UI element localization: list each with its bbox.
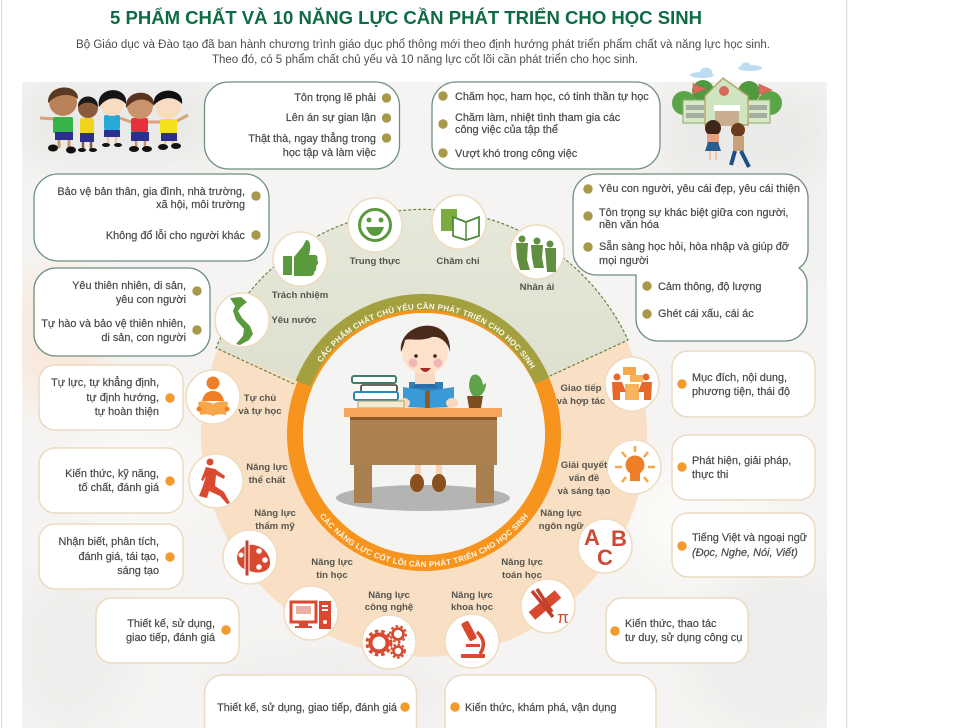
label: language: ngôn ngữ bbox=[539, 521, 583, 532]
panel: compassion details: mọi người bbox=[599, 255, 649, 267]
label: informatics: Năng lực bbox=[311, 557, 353, 568]
panel: self-reliance details: Tự lực, tự khẳng định, bbox=[51, 376, 159, 389]
label: technology: công nghệ bbox=[365, 602, 413, 613]
panel: patriotism details: Yêu thiên nhiên, di sản, bbox=[72, 280, 186, 292]
panel: technology details bbox=[204, 675, 416, 728]
panel: honesty details bbox=[204, 82, 400, 169]
panel: patriotism details: Tự hào và bảo vệ thiên nhiên, bbox=[41, 318, 186, 330]
label: communication: Giao tiếp bbox=[560, 383, 602, 394]
icon: smiley, honesty bbox=[348, 198, 402, 252]
panel: aesthetic details bbox=[39, 524, 183, 589]
panel: compassion details: nền văn hóa bbox=[599, 219, 660, 231]
panel: problem solving details: Phát hiện, giải pháp, bbox=[692, 455, 791, 467]
panel: aesthetic details: Nhận biết, phân tích, bbox=[58, 536, 159, 548]
label: mathematics bbox=[501, 557, 543, 581]
icon: ABC letters, language: C bbox=[597, 545, 613, 570]
panel: responsibility details bbox=[34, 174, 269, 261]
panel: diligence details: Chăm làm, nhiệt tình tham gia các bbox=[455, 112, 621, 124]
panel: compassion details: Sẵn sàng học hỏi, hòa nhập và giúp đỡ bbox=[599, 240, 789, 253]
panel: informatics details bbox=[96, 598, 239, 663]
icon: ABC letters, language bbox=[578, 519, 632, 573]
label: technology: Năng lực bbox=[368, 590, 410, 601]
background photo wash bbox=[10, 82, 870, 728]
label: problem solving bbox=[558, 460, 611, 497]
icon: reader, self-study bbox=[186, 370, 240, 424]
central illustration: student at desk bbox=[336, 326, 510, 511]
label: science: Năng lực bbox=[451, 590, 493, 601]
label: self-study: và tự học bbox=[238, 406, 282, 417]
label: language: Năng lực bbox=[540, 508, 582, 519]
panel: diligence details: Vượt khó trong công việc bbox=[455, 148, 578, 160]
label: self-study: Tự chủ bbox=[244, 393, 276, 404]
panel: technology details: Thiết kế, sử dụng, giao tiếp, đánh giá bbox=[217, 702, 398, 714]
panel: compassion details: Cảm thông, độ lượng bbox=[658, 281, 761, 293]
icon: microscope, science bbox=[445, 614, 499, 668]
panel: communication details bbox=[672, 351, 815, 417]
kid 2 bbox=[78, 96, 98, 152]
panel: mathematics details bbox=[606, 598, 748, 663]
icon: palette, aesthetic bbox=[223, 530, 277, 584]
icon: runner, physical bbox=[189, 454, 243, 508]
icon: books, diligence bbox=[432, 195, 486, 249]
panel: honesty details: Tôn trọng lẽ phải bbox=[294, 92, 376, 104]
panel: responsibility details: xã hội, môi trường bbox=[156, 199, 245, 211]
panel: compassion details: Ghét cái xấu, cái ác bbox=[658, 308, 754, 320]
icon: light bulb, problem solving bbox=[607, 440, 661, 494]
ring text: qualities: CÁC PHẨM CHẤT CHỦ YẾU CẦN PHÁT TRIỂN CHO HỌC SINH bbox=[318, 302, 536, 369]
panel: informatics details: Thiết kế, sử dụng, bbox=[127, 618, 215, 630]
label: aesthetic: Năng lực bbox=[254, 508, 296, 519]
label: technology bbox=[365, 590, 413, 613]
panel: science details bbox=[445, 675, 656, 728]
label: physical: Năng lực bbox=[246, 462, 288, 473]
label: responsibility: Trách nhiệm bbox=[272, 290, 328, 301]
panel: compassion details: Yêu con người, yêu cái đẹp, yêu cái thiện bbox=[599, 183, 800, 195]
panel: mathematics details: tư duy, sử dụng công cụ bbox=[625, 632, 742, 644]
illustration: group of children bbox=[40, 87, 188, 154]
label: patriotism: Yêu nước bbox=[271, 315, 317, 326]
panel: communication details: Mục đích, nội dung, bbox=[692, 372, 787, 384]
illustration: school and pupils bbox=[672, 62, 782, 167]
icon: thumbs up, responsibility bbox=[273, 232, 327, 286]
label: science: khoa học bbox=[451, 602, 494, 613]
ring: olive and orange bbox=[295, 302, 553, 563]
panel: mathematics details: Kiến thức, thao tác bbox=[625, 618, 717, 630]
panel: patriotism details bbox=[34, 268, 210, 356]
green qualities sector bbox=[216, 209, 628, 434]
panel: patriotism details: di sản, con người bbox=[101, 332, 186, 344]
label: language bbox=[539, 508, 583, 532]
icon: ruler compass pi, mathematics: π bbox=[557, 608, 569, 627]
panel: aesthetic details: sáng tạo bbox=[117, 565, 159, 577]
label: problem solving: và sáng tạo bbox=[558, 486, 611, 497]
panel: patriotism details: yêu con người bbox=[116, 294, 186, 306]
label: aesthetic bbox=[254, 508, 296, 532]
kid 4 bbox=[126, 93, 154, 152]
panel: compassion details: Tôn trọng sự khác biệt giữa con người, bbox=[599, 207, 788, 219]
label: diligence: Chăm chỉ bbox=[436, 256, 480, 267]
panel: honesty details: Lên án sự gian lận bbox=[286, 112, 376, 124]
icon: Vietnam map, patriotism bbox=[215, 293, 269, 347]
panel: compassion details bbox=[573, 174, 808, 341]
panel: language details: (Đọc, Nghe, Nói, Viết) bbox=[692, 547, 798, 559]
icon: ABC letters, language: B bbox=[611, 526, 627, 551]
panel: communication details: phương tiện, thái độ bbox=[692, 386, 790, 398]
panel: informatics details: giao tiếp, đánh giá bbox=[126, 632, 216, 644]
panel: problem solving details: thực thi bbox=[692, 469, 728, 481]
label: physical: thể chất bbox=[249, 475, 286, 486]
orange competencies disk bbox=[201, 211, 647, 657]
panel: problem solving details bbox=[672, 435, 815, 500]
panel: language details bbox=[672, 513, 815, 577]
icon: computer, informatics bbox=[284, 586, 338, 640]
panel: self-reliance details bbox=[39, 365, 183, 430]
label: self-study bbox=[238, 393, 282, 417]
intro text bbox=[76, 39, 770, 66]
ring text: competencies: CÁC NĂNG LỰC CỐT LÕI CẦN PHÁT TRIỂN CHO HỌC SINH bbox=[320, 513, 528, 567]
kid 5 bbox=[154, 91, 182, 150]
icon: people, compassion bbox=[510, 225, 564, 279]
panel: language details: Tiếng Việt và ngoại ngữ bbox=[692, 532, 807, 544]
panel: self-reliance details: tự định hướng, bbox=[86, 392, 159, 404]
panel: honesty details: học tập và làm việc bbox=[283, 147, 377, 159]
panel: responsibility details: Không đổ lỗi cho người khác bbox=[106, 229, 246, 242]
icon: people talking, communication bbox=[605, 357, 659, 411]
icon: ruler compass pi, mathematics bbox=[521, 579, 575, 633]
label: communication bbox=[557, 383, 606, 407]
icon: gears, technology bbox=[362, 615, 416, 669]
panel: physical details: tố chất, đánh giá bbox=[78, 482, 160, 494]
label: science bbox=[451, 590, 494, 613]
panel: physical details bbox=[39, 448, 183, 513]
panel: aesthetic details: đánh giá, tái tạo, bbox=[78, 551, 159, 563]
label: informatics: tin học bbox=[316, 570, 348, 581]
panel: self-reliance details: tự hoàn thiện bbox=[95, 406, 159, 418]
label: communication: và hợp tác bbox=[557, 396, 606, 407]
label: problem solving: Giải quyết bbox=[561, 460, 608, 471]
intro text: Bộ Giáo dục và Đào tạo đã ban hành chương trình giáo dục phổ thông mới theo định hướng phát triển phẩm chất và năng lực học sinh. bbox=[76, 39, 770, 51]
label: mathematics: Năng lực bbox=[501, 557, 543, 568]
panel: physical details: Kiến thức, kỹ năng, bbox=[65, 468, 159, 480]
panel: responsibility details: Bảo vệ bản thân, gia đình, nhà trường, bbox=[57, 186, 245, 198]
panel: diligence details bbox=[432, 82, 660, 169]
label: informatics bbox=[311, 557, 353, 581]
panel: science details: Kiến thức, khám phá, vận dụng bbox=[465, 702, 616, 714]
intro text: Theo đó, có 5 phẩm chất chủ yếu và 10 năng lực cốt lõi cần phát triển cho học sinh. bbox=[212, 54, 638, 66]
label: mathematics: toán học bbox=[502, 570, 543, 581]
label: physical bbox=[246, 462, 288, 486]
icon: ABC letters, language: A bbox=[584, 525, 600, 550]
panel: diligence details: công việc của tập thể bbox=[455, 124, 558, 136]
kid 1 bbox=[48, 87, 78, 154]
label: problem solving: vấn đề bbox=[569, 473, 599, 484]
label: compassion: Nhân ái bbox=[520, 282, 554, 293]
title: 5 PHẨM CHẤT VÀ 10 NĂNG LỰC CẦN PHÁT TRIỂN CHO HỌC SINH bbox=[110, 7, 702, 28]
kid 3 bbox=[99, 90, 126, 147]
panel: honesty details: Thật thà, ngay thẳng trong bbox=[248, 132, 376, 145]
label: aesthetic: thẩm mỹ bbox=[255, 521, 295, 532]
panel: diligence details: Chăm học, ham học, có tinh thần tự học bbox=[455, 91, 649, 103]
label: honesty: Trung thực bbox=[350, 256, 401, 267]
